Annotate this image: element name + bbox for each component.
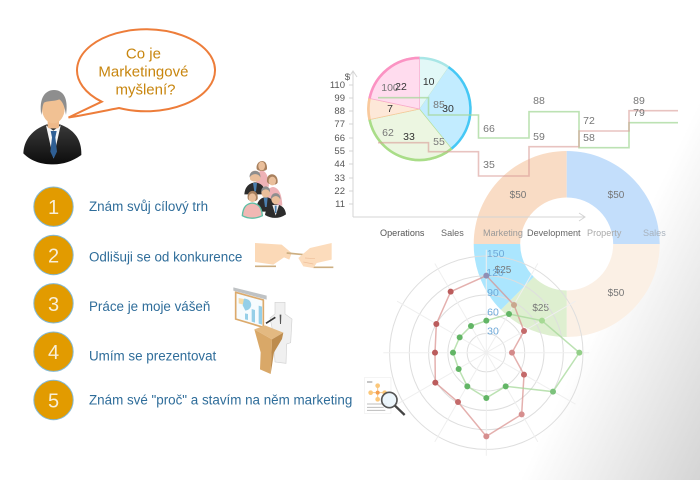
radar scale labels: 120 <box>486 267 504 279</box>
list item 3: 3 <box>48 294 59 316</box>
radar scale labels: 30 <box>487 326 499 338</box>
x axis labels: Sales <box>643 228 666 238</box>
pie chart: 7 <box>387 103 393 115</box>
x axis labels: Development <box>527 228 581 238</box>
donut chart: $25 <box>495 265 512 276</box>
donut chart: $50 <box>510 190 527 201</box>
series values: 66 <box>483 123 495 135</box>
y axis labels: 22 <box>334 186 345 197</box>
list item 4: 4 <box>48 342 59 364</box>
list item 2 <box>34 235 242 275</box>
donut chart: $25 <box>532 303 549 314</box>
x axis labels: Operations <box>380 228 425 238</box>
step line chart <box>330 71 678 238</box>
list item 3 <box>34 284 210 323</box>
radar grid <box>383 250 589 456</box>
radar chart <box>383 248 589 456</box>
y axis labels: 44 <box>334 159 345 170</box>
y axis labels: 110 <box>330 80 345 91</box>
series values: 100 <box>381 82 399 94</box>
donut chart: $50 <box>608 288 625 299</box>
y axis labels: 33 <box>334 173 345 184</box>
pie chart: 10 <box>423 76 435 88</box>
speech bubble <box>68 29 215 118</box>
series values: 55 <box>433 136 445 148</box>
y axis labels: 55 <box>334 146 345 157</box>
list item 3: Práce je moje vášeň <box>89 299 210 314</box>
series values: 62 <box>382 127 394 139</box>
series values: 58 <box>583 132 595 144</box>
y axis labels <box>330 72 351 210</box>
bubble question text: Marketingové <box>98 64 188 80</box>
radar scale labels: 90 <box>487 287 499 299</box>
icon: document with magnifier <box>364 378 405 415</box>
list item 4 <box>34 332 217 371</box>
green series <box>378 98 678 148</box>
donut chart: $50 <box>608 190 625 201</box>
series values: 35 <box>483 159 495 171</box>
y axis labels: 11 <box>335 199 345 210</box>
red series <box>378 111 678 176</box>
x axis labels: Property <box>587 228 622 238</box>
pie chart: 22 <box>395 81 407 93</box>
donut chart <box>474 151 660 337</box>
y axis labels: 66 <box>334 133 345 144</box>
series values: 88 <box>533 95 545 107</box>
list item 1: Znám svůj cílový trh <box>89 199 208 214</box>
list item 5: Znám své "proč" a stavím na něm marketing <box>89 392 352 408</box>
bubble question text: Co je <box>126 46 161 62</box>
icon: businessman <box>23 90 81 164</box>
bubble question text: myšlení? <box>115 82 176 98</box>
list item 2: 2 <box>48 245 59 267</box>
radar scale labels: 150 <box>487 248 505 260</box>
list item 4: Umím se prezentovat <box>89 348 217 364</box>
radar scale labels: 60 <box>487 306 499 318</box>
series values: 59 <box>533 131 545 143</box>
radar scale labels <box>486 248 505 338</box>
x axis labels <box>380 228 666 238</box>
pie chart <box>367 57 472 161</box>
series values: 89 <box>633 95 645 107</box>
x axis labels: Sales <box>441 228 464 238</box>
list item 2: Odlišuji se od konkurence <box>89 250 242 264</box>
icon: group of people <box>242 161 286 218</box>
series values: 72 <box>583 115 595 127</box>
list item 5: 5 <box>48 390 59 412</box>
series values: 85 <box>433 99 445 111</box>
list item 1: 1 <box>48 197 59 219</box>
y axis labels: 88 <box>334 106 345 117</box>
series values <box>381 82 645 171</box>
pie chart: 33 <box>403 131 415 143</box>
series values: 79 <box>633 107 645 119</box>
icon: handshake with rope <box>255 243 333 268</box>
list item 5 <box>34 380 352 420</box>
y axis labels: 77 <box>334 119 345 130</box>
chart axes <box>349 71 585 221</box>
red series <box>432 273 527 439</box>
pie chart: 30 <box>442 103 454 115</box>
icon: presenter at podium <box>233 287 292 374</box>
y axis labels: 99 <box>334 93 345 104</box>
green series <box>450 311 582 401</box>
y axis labels: $ <box>345 72 351 83</box>
list item 1 <box>34 187 208 226</box>
x axis labels: Marketing <box>483 228 523 238</box>
